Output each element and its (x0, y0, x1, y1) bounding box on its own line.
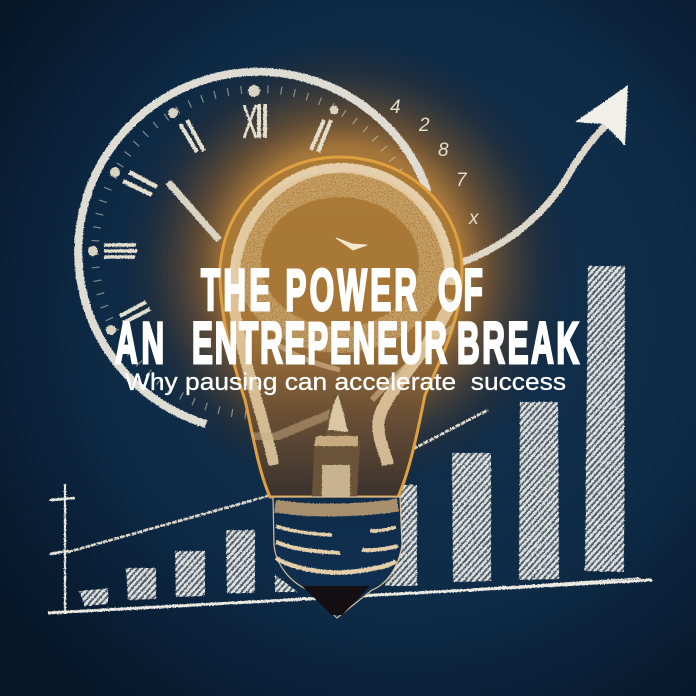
clock numbers on the right: 4 (390, 97, 401, 118)
title: OF (438, 258, 483, 322)
trend line (68, 410, 488, 552)
bar chart (48, 266, 652, 614)
light bulb (220, 157, 462, 618)
title: BREAK (457, 311, 579, 375)
clock numbers on the right: 8 (438, 140, 449, 161)
title: AN (115, 311, 164, 375)
title (115, 258, 579, 375)
clock numerals (104, 104, 331, 323)
bulb screw base (273, 497, 402, 618)
clock numbers on the right: 2 (418, 115, 430, 136)
subtitle: Why pausing can accelerate success (125, 369, 566, 396)
clock numbers on the right: x (468, 208, 480, 229)
title: THE POWER (201, 258, 417, 322)
clock numbers on the right (390, 97, 480, 229)
bulb glass (220, 157, 462, 497)
clock minute hand (168, 182, 219, 240)
clock minute ticks (95, 89, 421, 415)
axes (48, 484, 652, 614)
bulb chalk shading (230, 168, 462, 465)
title: ENTREPENEUR (192, 311, 447, 375)
clock rim (78, 72, 428, 424)
bars (79, 266, 625, 606)
clock (78, 72, 480, 424)
growth arrow (460, 85, 628, 263)
clock ornaments (88, 85, 338, 335)
bulb base tip (302, 586, 370, 615)
bulb filament (312, 395, 360, 497)
clock numbers on the right: 7 (456, 170, 468, 191)
